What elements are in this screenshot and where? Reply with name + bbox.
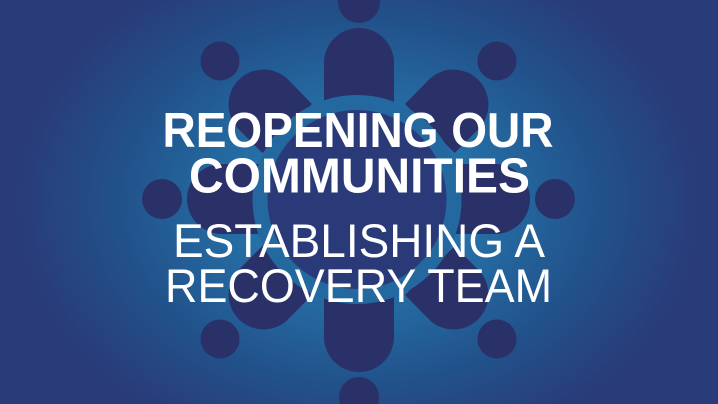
person: bottom left [200,246,312,358]
icon: circle of people [142,0,575,404]
heading line 2: COMMUNITIES [189,150,530,204]
person: top [324,0,394,110]
subheading line 2: RECOVERY TEAM [165,260,552,313]
person: left [142,164,277,234]
person: top left [200,42,312,153]
person: bottom [324,290,394,404]
person: top right [405,42,516,153]
ring [260,102,454,296]
heading line 1: REOPENING OUR [162,104,554,158]
subheading line 1: ESTABLISHING A [173,215,545,268]
person: bottom right [405,246,516,358]
person: right [440,164,575,234]
heading [162,104,554,313]
